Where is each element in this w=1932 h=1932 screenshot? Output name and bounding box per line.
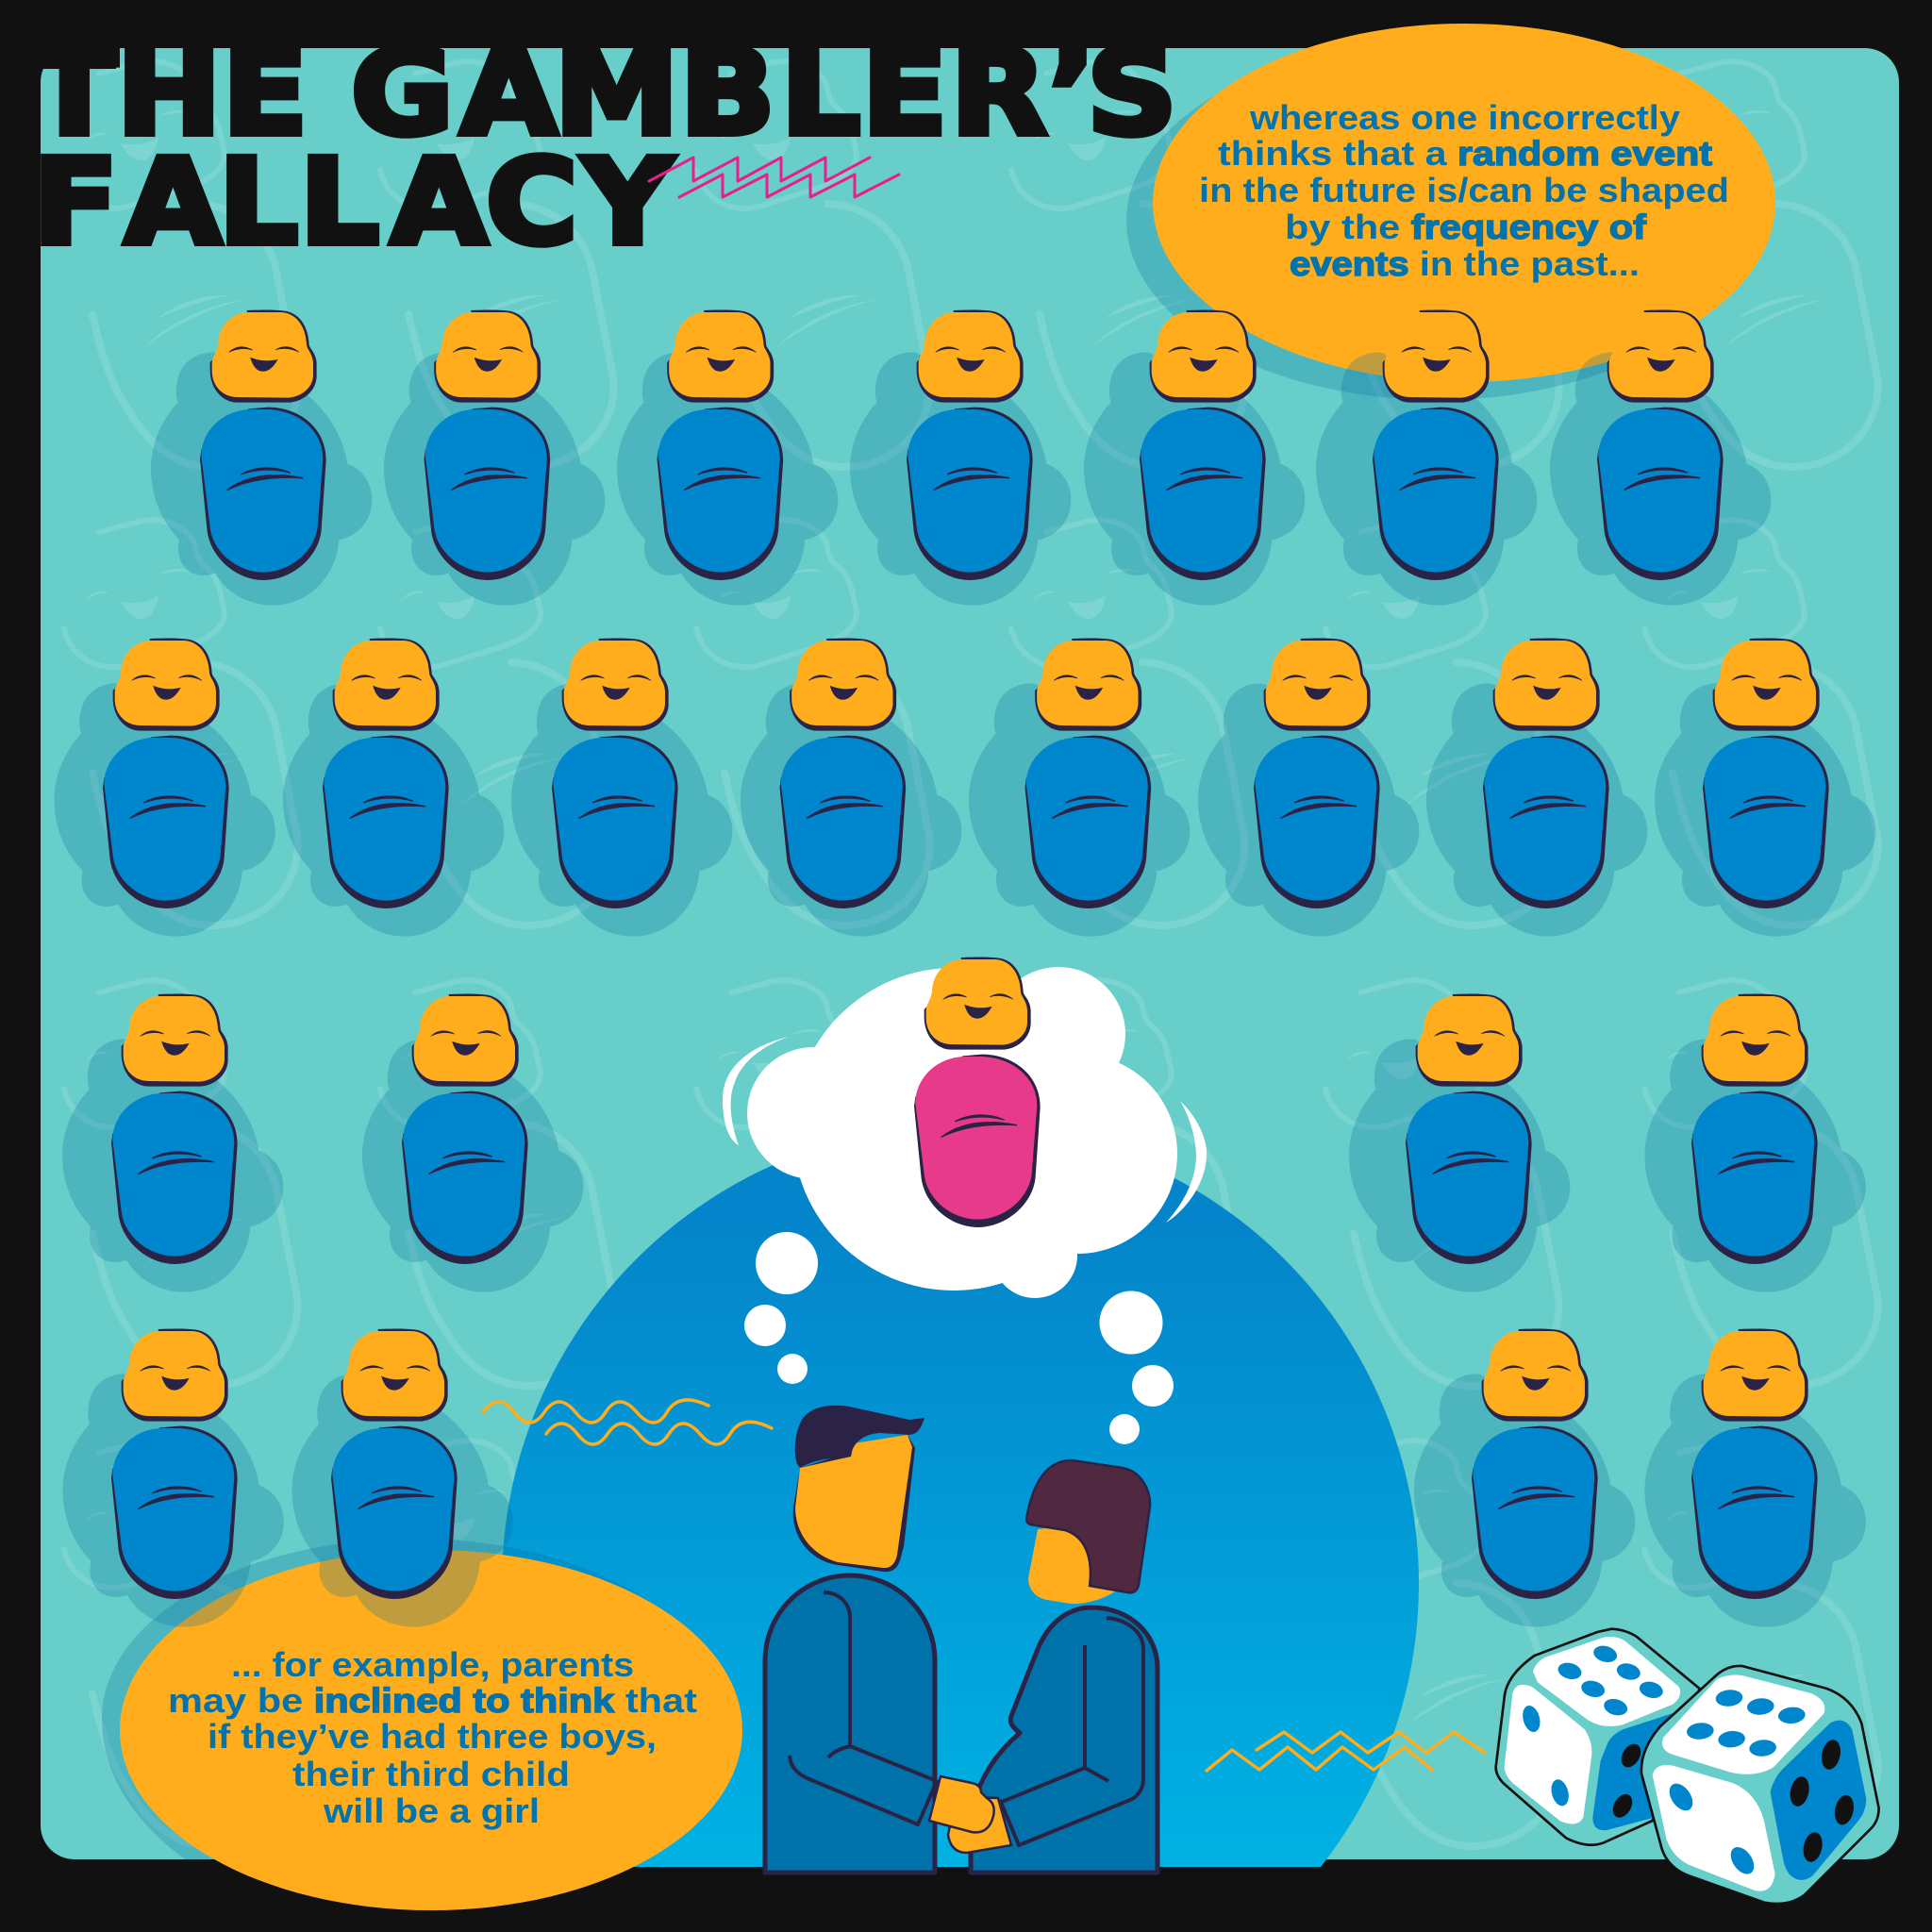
row 3 of babies [62,994,1866,1292]
squiggle: yellow zigzags [1207,1732,1485,1771]
callout: top explanation: events in the past... [1290,244,1640,283]
callout: top explanation: whereas one incorrectly [1249,98,1680,137]
callout: bottom example: may be inclined to think that [168,1681,697,1720]
woman: body [971,1607,1158,1873]
title: THE GAMBLER’S [32,25,1177,162]
row 2 of babies [54,639,1875,937]
callout: bottom example: if they’ve had three boys, [208,1717,657,1756]
squiggle: yellow waves [483,1400,772,1444]
large blue circle behind the couple [502,1125,1419,1867]
title [32,25,1177,272]
thought bubbles: right [1100,1291,1174,1444]
callout: top explanation: thinks that a random event [1218,134,1712,173]
woman: hair [1026,1460,1150,1592]
woman: arm lines [1000,1618,1143,1845]
squiggle: pink zigzags [649,158,899,197]
callout: bottom example: ... for example, parents [231,1645,634,1684]
man: body [765,1575,935,1873]
row 1 of babies [151,310,1771,606]
woman: face [1028,1526,1115,1604]
die: back [1496,1629,1700,1845]
man: face outline [793,1435,915,1572]
die: front [1641,1666,1879,1904]
callout shadow: bottom ellipse [102,1539,724,1859]
man [765,1406,937,1873]
woman [948,1460,1158,1873]
callout: top explanation: by the frequency of [1285,208,1647,246]
man: hair [795,1406,924,1468]
callout: top explanation [1153,24,1775,382]
callout shadow: top ellipse [1126,42,1749,400]
thought cloud [723,967,1207,1298]
callout: bottom example: their third child [292,1755,570,1793]
man: arm lines [790,1592,937,1824]
callout: top explanation: in the future is/can be shaped [1199,171,1729,209]
man: hand [929,1776,994,1832]
imagined pink baby [914,958,1041,1227]
row 4 of babies [62,1329,1866,1627]
man: face fill [795,1435,912,1568]
dice pair [1496,1629,1879,1904]
thought bubbles: left [744,1232,818,1384]
callout: bottom example: will be a girl [323,1791,540,1830]
woman: hand [948,1797,1011,1853]
callout: bottom example [120,1550,742,1910]
title: FALLACY [33,134,675,272]
